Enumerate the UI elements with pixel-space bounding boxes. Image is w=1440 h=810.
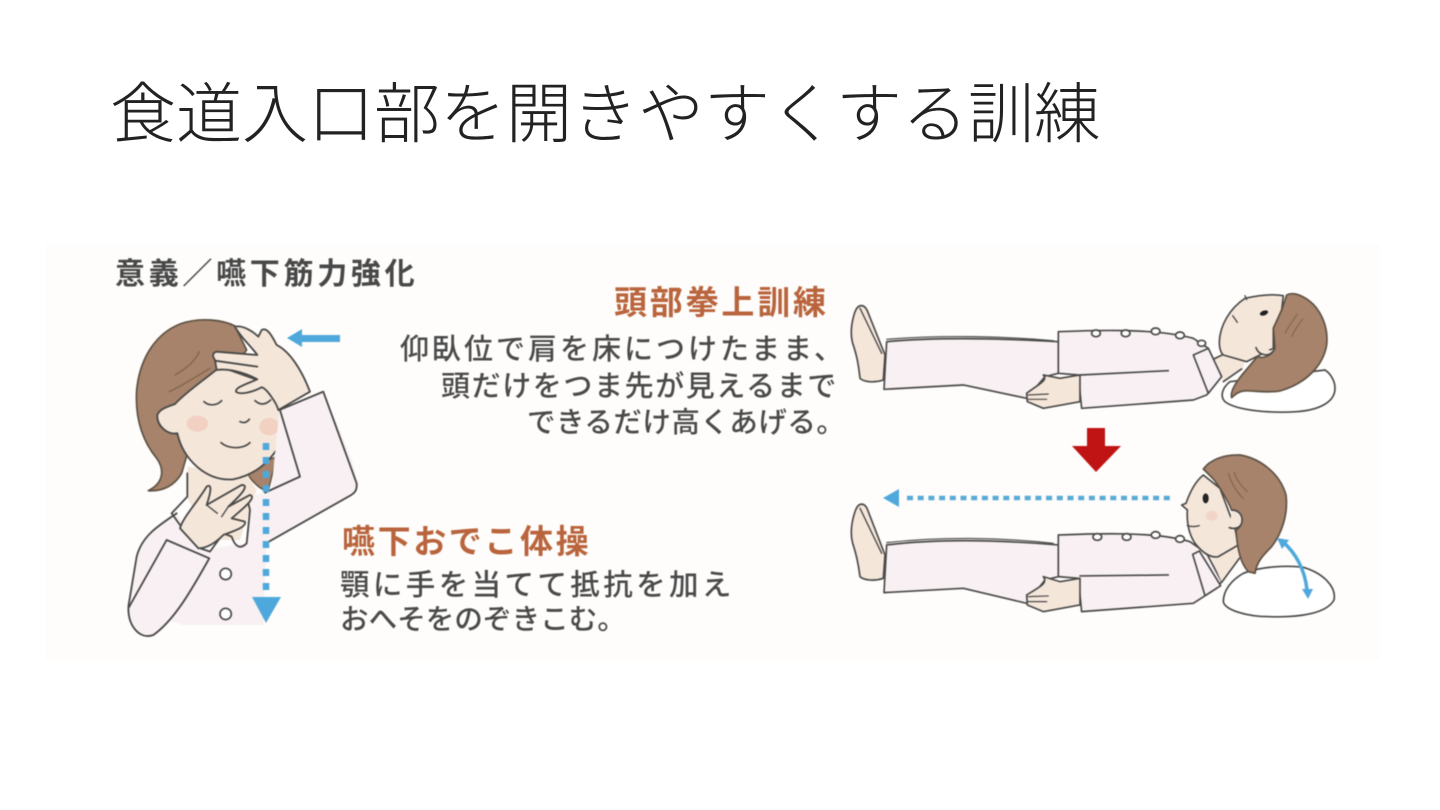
icon: dotted down arrow xyxy=(252,443,281,623)
icon: pressing arrow xyxy=(287,329,340,347)
face xyxy=(157,367,285,479)
illustration: lying with head raised xyxy=(851,504,1222,612)
blush xyxy=(1206,511,1218,521)
neck xyxy=(1212,352,1247,382)
collar xyxy=(1193,348,1222,393)
hair lines xyxy=(1285,314,1303,337)
icon: curved double arrow xyxy=(1277,538,1313,599)
face xyxy=(1182,475,1238,557)
ear xyxy=(1256,348,1273,355)
collar xyxy=(172,473,250,552)
text block: forehead exercise instructions xyxy=(340,569,735,636)
illustration: head on pillow, top figure xyxy=(1193,294,1335,412)
buttons xyxy=(220,568,231,580)
foot xyxy=(851,504,885,580)
trousers xyxy=(884,541,1058,603)
raised sleeve xyxy=(266,392,357,543)
icon: red down arrow xyxy=(1072,428,1121,472)
text block: head lift instructions: できるだけ高くあげる。 xyxy=(527,407,845,439)
trousers xyxy=(884,339,1058,398)
torso xyxy=(1058,330,1222,408)
hair xyxy=(1203,455,1286,573)
chest hand xyxy=(180,485,252,548)
hair xyxy=(136,320,247,491)
hair xyxy=(1231,294,1327,398)
foot xyxy=(851,306,885,382)
facial features xyxy=(204,400,271,448)
pillow xyxy=(1222,370,1335,412)
hair lines xyxy=(169,352,210,392)
neck xyxy=(187,467,257,540)
collar xyxy=(1193,551,1221,596)
blush xyxy=(187,416,208,432)
panel: exercise illustration background xyxy=(45,245,1380,660)
text block: head lift instructions: 仰臥位で肩を床につけたまま、 xyxy=(400,334,846,366)
lower sleeve xyxy=(128,540,209,636)
text block: forehead exercise instructions: 顎に手を当てて抵抗を加え xyxy=(340,569,735,602)
text block: forehead exercise instructions: おへそをのぞきこむ。 xyxy=(340,604,626,636)
heading: head lift exercise: 頭部拳上訓練 xyxy=(614,284,829,321)
buttons xyxy=(1092,328,1206,346)
ear xyxy=(1229,510,1242,528)
neck xyxy=(1210,528,1240,582)
text block: head lift instructions: 頭だけをつま先が見えるまで xyxy=(441,371,838,403)
hand xyxy=(1027,577,1080,612)
hair lines xyxy=(1228,472,1247,498)
buttons xyxy=(1093,532,1184,542)
illustration: lying flat with head on pillow xyxy=(851,306,1222,408)
torso xyxy=(1058,534,1222,612)
title: 食道入口部を開きやすくする訓練 xyxy=(110,77,1100,151)
heading: purpose: 意義／嚥下筋力強化 xyxy=(115,258,418,291)
raised hand xyxy=(213,326,310,410)
illustration: raised head and pillow, bottom figure xyxy=(1182,455,1334,617)
icon: dotted gaze arrow xyxy=(883,489,1174,507)
pillow xyxy=(1223,566,1334,617)
face xyxy=(1219,295,1283,362)
illustration: woman pressing forehead xyxy=(128,320,357,636)
text block: head lift instructions xyxy=(400,334,846,439)
hand xyxy=(1027,375,1080,408)
body xyxy=(128,392,357,625)
heading: forehead exercise: 嚥下おでこ体操 xyxy=(342,523,591,560)
